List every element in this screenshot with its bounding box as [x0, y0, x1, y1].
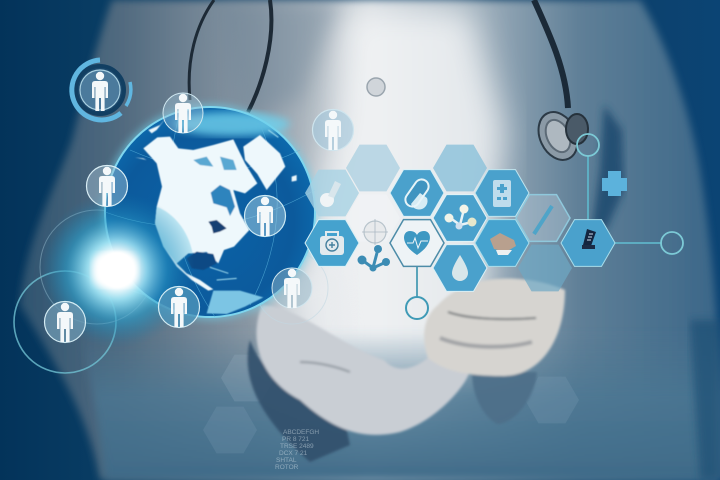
- bandage hexagon: [475, 220, 529, 266]
- device hexagon: [561, 220, 615, 266]
- person node: left of globe: [86, 166, 128, 206]
- faint code text: TRSE 2489: [280, 443, 314, 450]
- person: top ring gauge: [72, 60, 131, 120]
- medical kit hexagon: [305, 220, 359, 266]
- pale hexagon upper left: [346, 145, 400, 191]
- hands: [248, 279, 565, 462]
- globe: [102, 104, 318, 320]
- faint code text: SHTAL: [276, 457, 297, 464]
- heart rate hexagon: [390, 220, 444, 266]
- person node: lower left: [44, 302, 86, 342]
- person node: globe bottom: [158, 286, 200, 328]
- person node: right of globe: [312, 110, 354, 150]
- continents: [135, 115, 297, 314]
- connector lines and nodes: [406, 134, 683, 319]
- medical cross icon: [602, 171, 627, 196]
- faint code text: DCX 7 21: [279, 450, 308, 457]
- person node: globe right bottom: [272, 268, 312, 308]
- small network icon: [358, 245, 390, 272]
- coat button: [367, 78, 385, 96]
- lens glow: [39, 192, 195, 348]
- pale hexagon lower right: [518, 245, 572, 291]
- water drop hexagon: [433, 245, 487, 291]
- faint code text: [275, 429, 319, 471]
- thermometer hexagon: [305, 170, 359, 216]
- person node: on globe: [244, 196, 286, 236]
- network hexagon: [433, 195, 487, 241]
- outlined syringe hexagon: [516, 195, 570, 241]
- person node: top of globe: [163, 93, 203, 133]
- pill hexagon: [390, 170, 444, 216]
- faint code text: ROTOR: [275, 464, 299, 471]
- faint code text: ABCDEFGH: [283, 429, 319, 436]
- faint code text: PR 8 721: [282, 436, 309, 443]
- stethoscope: [189, 0, 588, 166]
- lens glow halo behind globe: [45, 198, 189, 342]
- network rings: [14, 122, 328, 373]
- clipboard hexagon: [475, 170, 529, 216]
- hexagon grid: [305, 145, 615, 291]
- pale hexagon upper right: [433, 145, 487, 191]
- lower coat haze with faint hexagons: [80, 320, 720, 480]
- white crosshair hexagon: [346, 195, 400, 245]
